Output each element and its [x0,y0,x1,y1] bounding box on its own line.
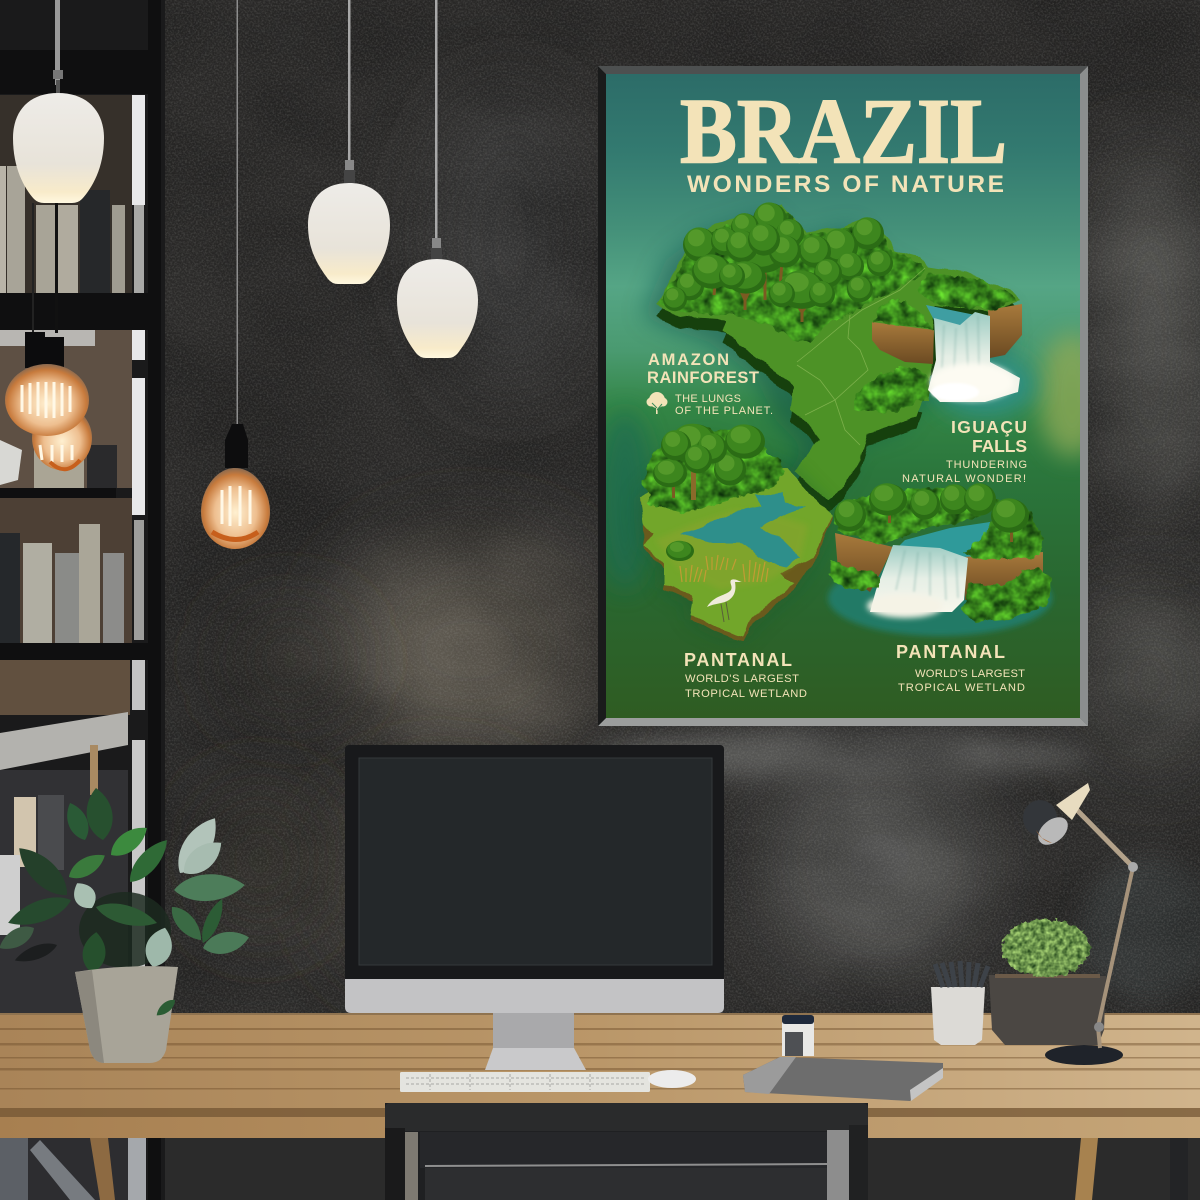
pot [75,966,178,1063]
poster subtitle: WONDERS OF NATURE [687,171,1004,198]
pantanal shadow [642,470,824,509]
reed grass tufts [680,555,768,582]
central canopy [855,366,928,412]
label: amazon rainforest: THE LUNGS [675,393,741,405]
pendant lamp: centre white [308,0,390,284]
iguacu waterfall [928,312,1020,402]
light slits [132,95,145,990]
label: amazon rainforest: AMAZON [648,351,729,369]
pantanal forest [642,428,786,512]
books upper shelf [0,166,125,293]
desk lamp [1023,783,1138,1065]
label: pantanal right: PANTANAL [896,642,1005,662]
iguacu cliffs [872,304,1022,364]
label: iguacu falls: IGUAÇU [951,417,1027,437]
poster artwork [597,74,1106,718]
desk planter [989,919,1106,1045]
iguacu water above falls [926,305,972,325]
potted plant [0,786,251,1063]
right lower bushes [962,565,1052,622]
right forest of island [962,505,1043,560]
state border lines [797,268,925,445]
illustration: pantanal wetland [640,424,833,642]
label: pantanal right [896,642,1025,694]
leaves [0,786,251,974]
left lower bushes [830,560,880,590]
pantanal water [680,492,807,567]
mouse [648,1070,696,1088]
northeast coast canopy [918,274,1016,309]
edison bulbs on shelf [5,332,92,470]
waterfall [867,545,968,618]
pool of water [828,560,1052,636]
pen holder [931,961,988,1045]
pantanal land [640,468,833,636]
notebook [743,1057,943,1101]
lower frame below desk [0,1138,146,1200]
poster background [597,74,1106,718]
label: pantanal left [684,650,807,700]
illustration: brazil map with amazon and iguacu falls [643,202,1035,512]
label: iguacu falls: FALLS [972,436,1027,456]
forest near falls [872,298,934,330]
bookshelf on left [0,0,165,1200]
desk [0,1013,1200,1200]
desk top [0,1013,1200,1108]
books lower shelf [0,745,98,935]
books middle shelf [0,442,124,643]
shelf boards [0,0,161,1200]
wood grain [0,1028,1200,1090]
poster frame [598,66,1088,726]
pendant lamp: shelf white [13,0,104,333]
office chair [385,1103,868,1200]
island trees [834,483,1029,542]
desk legs [90,1138,1188,1200]
label: pantanal left: TROPICAL WETLAND [685,688,807,700]
left cliff [835,533,893,592]
river above the falls [895,522,1005,560]
top forest of island [835,488,1000,545]
label: iguacu falls [902,421,1026,482]
label: pantanal right: TROPICAL WETLAND [898,682,1025,694]
icon: tree [646,392,668,414]
amazon forest canopy [660,208,925,345]
shelf rear panels [0,95,132,1015]
individual rainforest trees [663,202,893,322]
keyboard [400,1072,650,1092]
right cliff [963,552,1043,600]
label: amazon rainforest: RAINFOREST [647,369,759,387]
illustration: iguacu falls island [828,483,1052,636]
label: iguacu falls: NATURAL WONDER! [902,473,1026,485]
pendant lamp: right white [397,0,478,358]
pantanal trees [653,424,765,561]
label: amazon rainforest [646,351,773,417]
map extrusion [656,303,1014,512]
label: iguacu falls: THUNDERING [946,459,1027,471]
map cast shadow [643,214,1007,510]
map top surface [657,204,1020,500]
label: amazon rainforest: OF THE PLANET. [675,405,773,417]
icon: white egret [707,579,742,622]
coffee cup [782,1015,814,1056]
label: pantanal left: PANTANAL [684,650,792,670]
edison bulb on wall [201,0,270,549]
water around falls [935,353,1035,417]
label: pantanal left: WORLD'S LARGEST [685,673,799,685]
poster title: BRAZIL [680,80,1007,184]
pantanal land edge [640,500,833,641]
label: pantanal right: WORLD'S LARGEST [915,668,1025,680]
monitor [345,745,724,1070]
